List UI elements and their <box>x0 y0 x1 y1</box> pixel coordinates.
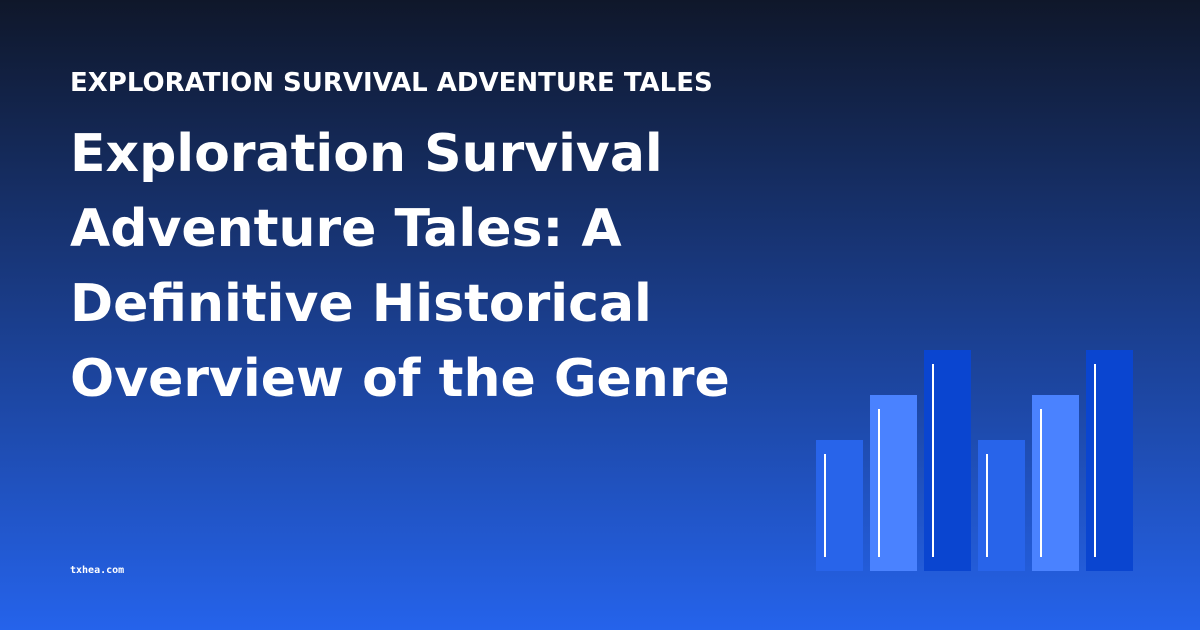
bar 5 <box>1032 395 1079 571</box>
bar 4 <box>978 440 1025 571</box>
bar 1 <box>816 440 863 571</box>
main title: Adventure Tales: A <box>70 199 622 259</box>
main title: Definitive Historical <box>70 274 652 334</box>
main title: Overview of the Genre <box>70 349 730 409</box>
bar 2 <box>870 395 917 571</box>
bar 6 <box>1086 350 1133 571</box>
bar 3 <box>924 350 971 571</box>
main title: Exploration Survival <box>70 124 663 184</box>
kicker heading: EXPLORATION SURVIVAL ADVENTURE TALES <box>70 68 713 98</box>
footer domain: txhea.com <box>70 565 124 576</box>
bar chart illustration <box>816 350 1133 571</box>
main title <box>70 124 730 409</box>
